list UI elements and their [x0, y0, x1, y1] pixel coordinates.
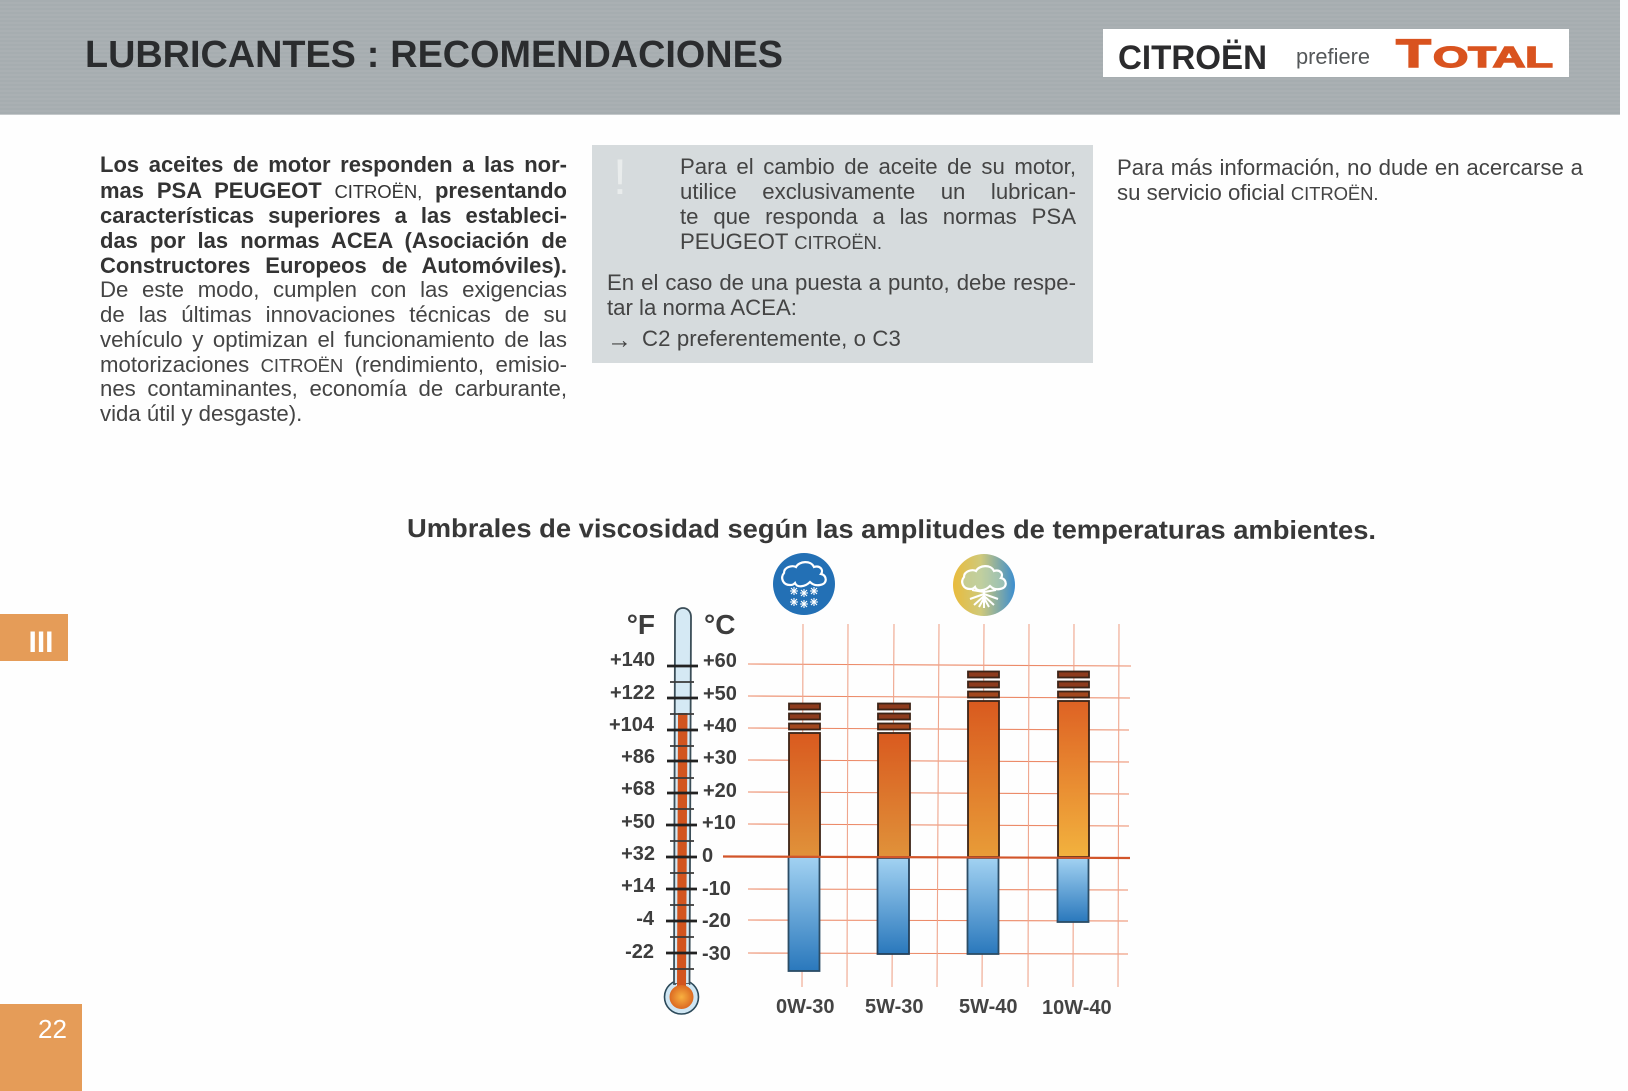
- text block: left column: Constructores Europeos de Automóviles).: [100, 253, 567, 278]
- text block: right column: [1117, 155, 1583, 205]
- bar labels: 0W-30: [776, 996, 835, 1018]
- text block: left column: De este modo, cumplen con las exigencias: [100, 277, 567, 302]
- scale labels: Fahrenheit: +50: [621, 811, 655, 833]
- note text: C2 preferentemente, o C3: [642, 326, 901, 351]
- bar: 5W-40: [968, 672, 999, 954]
- scale labels: Fahrenheit: +32: [621, 843, 655, 865]
- bar: 0W-30: [788, 704, 820, 971]
- tab: page number: [0, 1004, 82, 1091]
- chapter numeral: III: [28, 626, 54, 659]
- note text: Para el cambio de aceite de su motor,: [680, 154, 1076, 179]
- bar: 10W-40: [1058, 672, 1089, 922]
- word: prefiere: prefiere: [1296, 44, 1370, 69]
- zero line: [723, 856, 1130, 858]
- text block: left column: [100, 152, 567, 426]
- thermometer ticks: [666, 666, 698, 969]
- scale labels: Celsius: +20: [703, 780, 737, 802]
- note text: tar la norma ACEA:: [607, 295, 797, 320]
- text block: left column: vehículo y optimizan el funcionamiento de las: [100, 327, 567, 352]
- brand: Total: [1396, 32, 1553, 76]
- header band: [0, 0, 1620, 115]
- brand logo box: [1103, 29, 1569, 77]
- scale labels: Celsius: +50: [703, 683, 737, 705]
- tab: chapter III: [0, 614, 68, 661]
- bar labels: 10W-40: [1042, 997, 1112, 1019]
- text block: left column: Los aceites de motor responden a las nor-: [100, 152, 567, 177]
- icon: snow cloud: [773, 553, 835, 615]
- chart grid: [748, 624, 1131, 987]
- note text: utilice exclusivamente un lubrican-: [680, 179, 1076, 204]
- page number: 22: [38, 1014, 67, 1044]
- brand: Citroen: CITROËN: [1118, 39, 1267, 77]
- text block: left column: características superiores a las estableci-: [100, 203, 567, 228]
- bar labels: 5W-30: [865, 996, 924, 1018]
- chart heading: Umbrales de viscosidad según las amplitudes de temperaturas ambientes.: [407, 513, 1376, 545]
- scale labels: Fahrenheit: +68: [621, 778, 655, 800]
- text block: left column: de las últimas innovaciones técnicas de su: [100, 302, 567, 327]
- note text: [607, 154, 1076, 354]
- scale labels: Celsius: -10: [702, 878, 731, 900]
- brand: Total: OTAL: [1433, 42, 1553, 74]
- text block: left column: motorizaciones CITROËN (rendimiento, emisio-: [100, 352, 567, 377]
- note text: →: [607, 326, 632, 354]
- text block: left column: das por las normas ACEA (Asociación de: [100, 228, 567, 253]
- icon: mixed weather cloud: [953, 554, 1015, 616]
- scale labels: Celsius: +60: [703, 650, 737, 672]
- text block: left column: nes contaminantes, economía de carburante,: [100, 376, 567, 401]
- scale labels: Celsius: +30: [703, 747, 737, 769]
- note text: En el caso de una puesta a punto, debe respe-: [607, 270, 1076, 295]
- panel: warning note: [592, 145, 1093, 363]
- scale labels: Fahrenheit: +140: [610, 649, 655, 671]
- scale labels: Fahrenheit: +86: [621, 746, 655, 768]
- scale labels: Fahrenheit: [609, 609, 656, 963]
- scale labels: Fahrenheit: -4: [636, 908, 655, 930]
- note text: te que responda a las normas PSA: [680, 204, 1076, 229]
- title: LUBRICANTES : RECOMENDACIONES: [85, 34, 783, 76]
- text block: right column: Para más información, no dude en acercarse a: [1117, 155, 1583, 180]
- text block: right column: su servicio oficial CITROËN.: [1117, 180, 1378, 205]
- scale labels: Celsius: +10: [702, 812, 736, 834]
- bar: 5W-30: [878, 704, 910, 954]
- brand: Total: T: [1396, 32, 1431, 76]
- icon: exclamation mark: !: [613, 149, 627, 205]
- scale labels: Fahrenheit: +14: [621, 875, 656, 897]
- scale labels: Fahrenheit: °F: [627, 609, 655, 640]
- bar labels: 5W-40: [959, 996, 1018, 1018]
- text block: left column: mas PSA PEUGEOT CITROËN, presentando: [100, 178, 567, 203]
- scale labels: Celsius: -20: [702, 910, 731, 932]
- scale labels: Fahrenheit: +104: [609, 714, 655, 736]
- scale labels: Celsius: [702, 609, 737, 965]
- scale labels: Celsius: +40: [703, 715, 737, 737]
- scale labels: Fahrenheit: -22: [625, 941, 654, 963]
- scale labels: Celsius: °C: [704, 609, 735, 640]
- note text: PEUGEOT CITROËN.: [680, 229, 882, 254]
- scale labels: Celsius: 0: [702, 845, 713, 867]
- text block: left column: vida útil y desgaste).: [100, 401, 302, 426]
- scale labels: Celsius: -30: [702, 943, 731, 965]
- bar labels: [776, 996, 1112, 1019]
- thermometer: [664, 608, 698, 1014]
- scale labels: Fahrenheit: +122: [610, 682, 655, 704]
